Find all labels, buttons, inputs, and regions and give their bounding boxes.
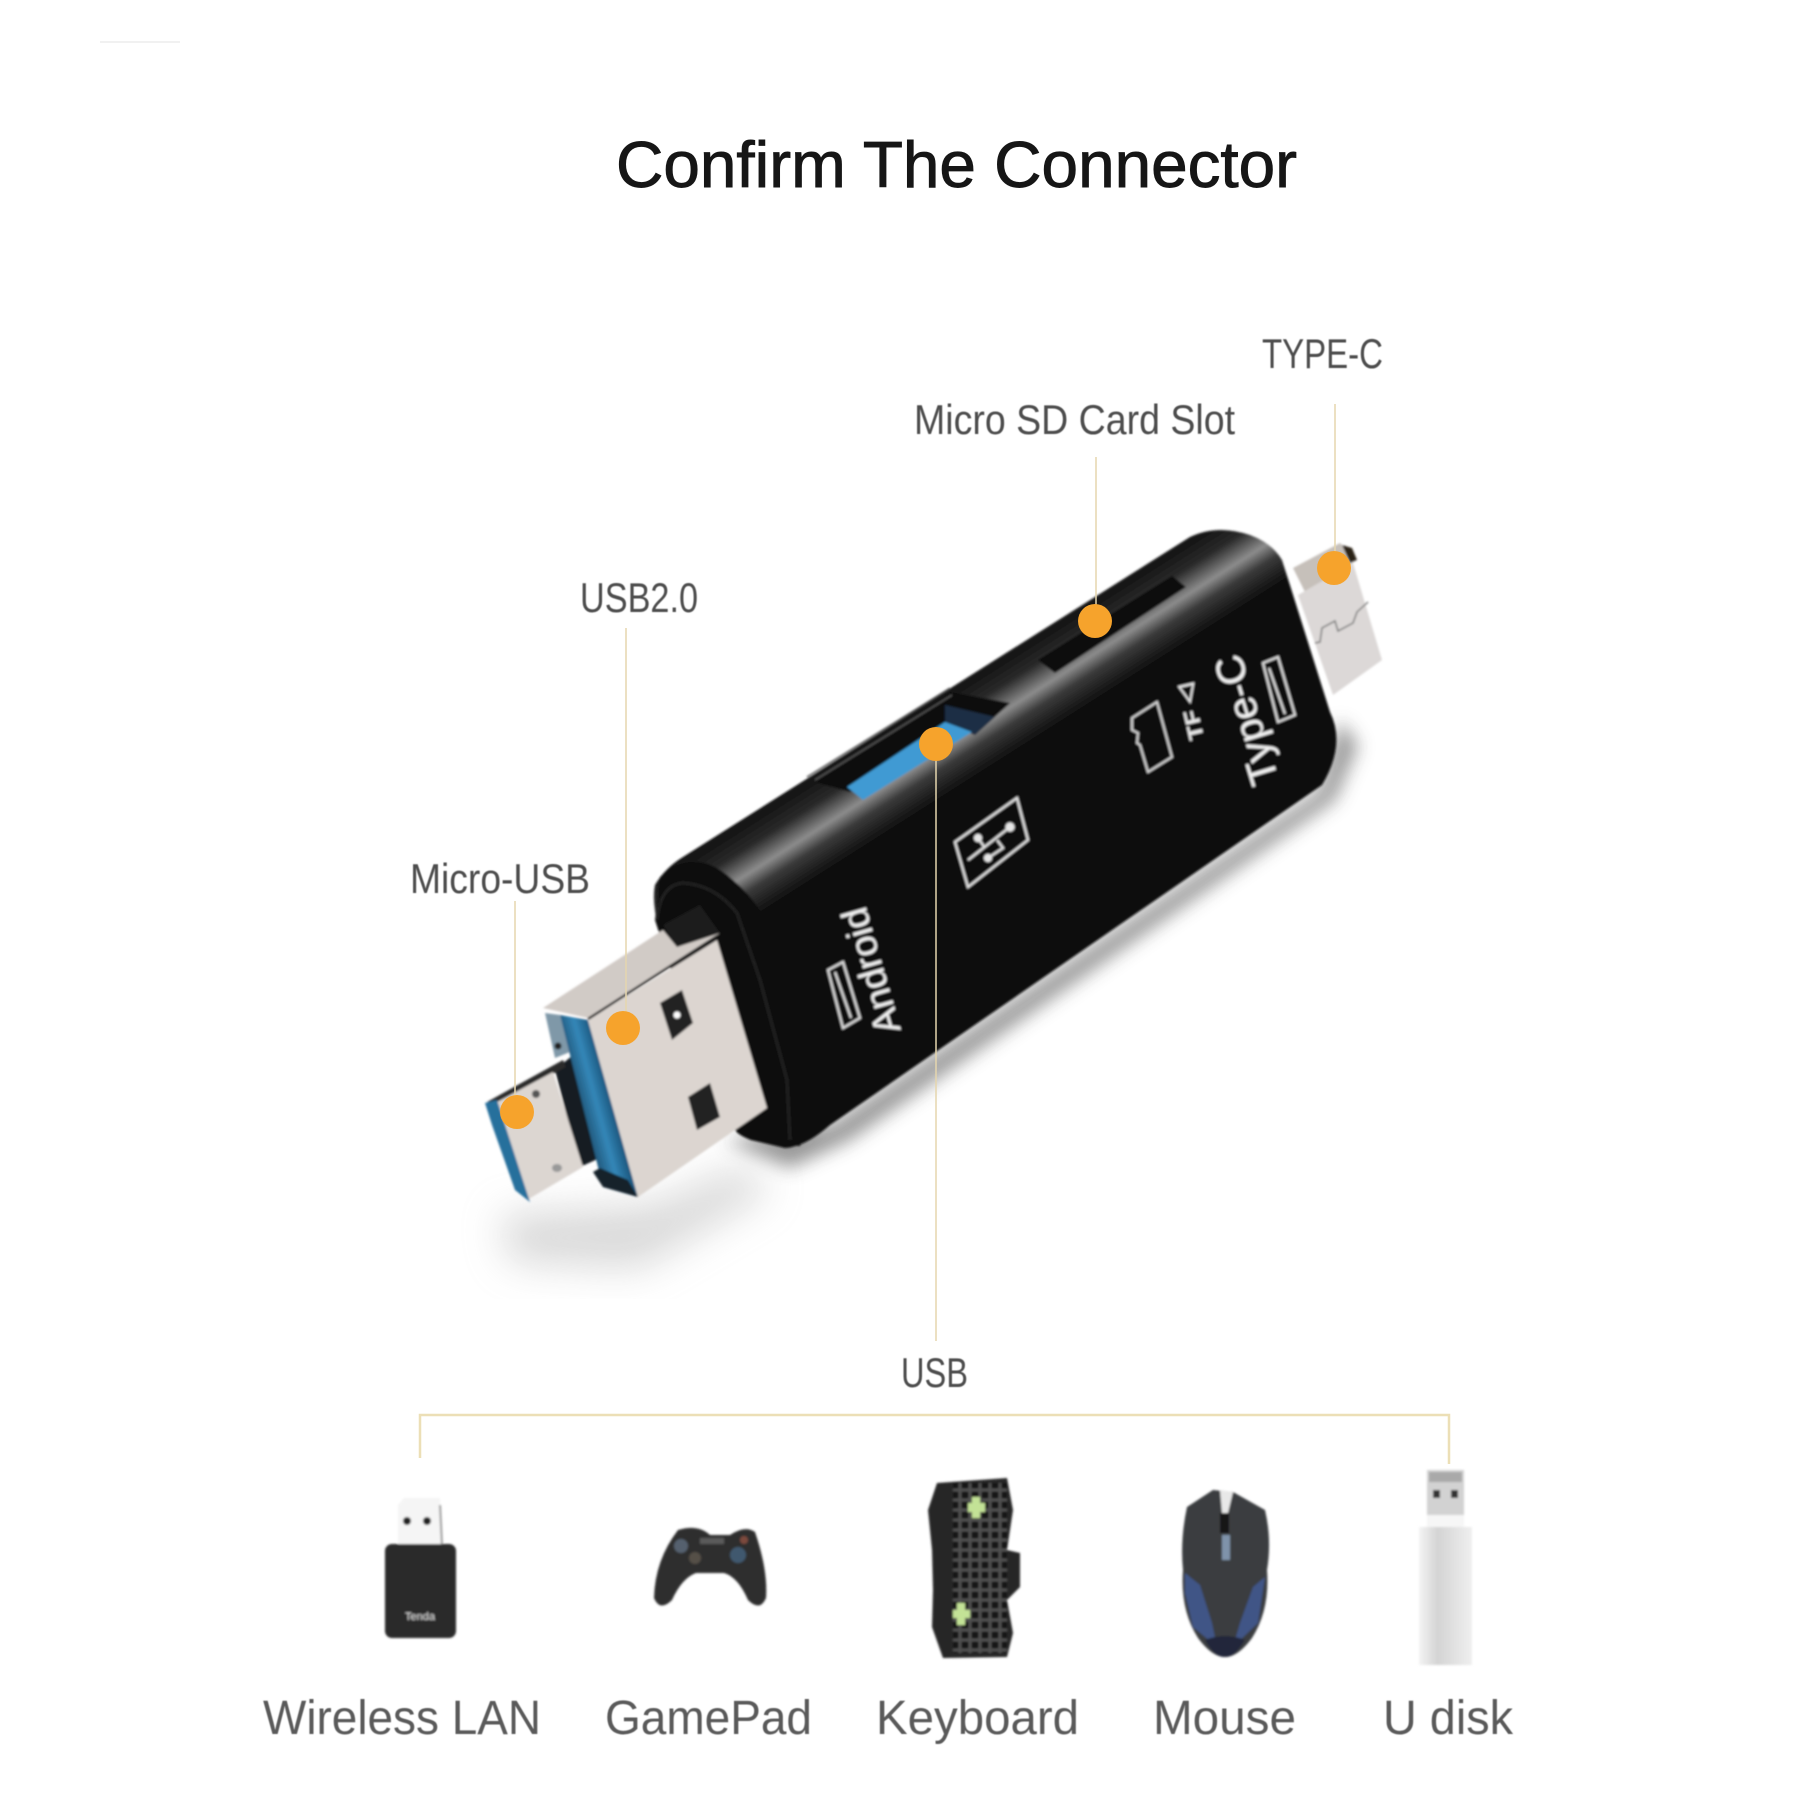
micro-USB plug	[485, 1055, 602, 1202]
icon: mouse	[1182, 1490, 1269, 1657]
label: Micro-USB: Micro-USB	[410, 855, 590, 902]
leader line: USB	[935, 744, 937, 1341]
micro SD slot	[1038, 576, 1186, 673]
leader line: USB2.0	[625, 628, 627, 1022]
adapter body	[654, 530, 1336, 1148]
icon: U disk	[1419, 1470, 1472, 1665]
marker dot: USB	[919, 727, 953, 761]
adapter product illustration	[485, 530, 1382, 1268]
end collar	[655, 862, 817, 1146]
icon: wireless LAN adapter: Tenda	[405, 1611, 436, 1623]
marker dot: TYPE-C	[1317, 551, 1351, 585]
label: Keyboard: Keyboard	[876, 1692, 1079, 1745]
Type-C marking: Type-C	[1206, 649, 1288, 790]
Type-C plug	[1293, 543, 1382, 695]
label: U disk: U disk	[1383, 1692, 1514, 1745]
Android marking: Android	[833, 903, 909, 1039]
leader line: Micro SD	[1095, 457, 1097, 620]
USB symbol mark	[955, 798, 1028, 887]
icon: wireless LAN adapter	[385, 1498, 456, 1638]
bracket connecting USB devices	[420, 1415, 1449, 1464]
label: Micro SD Card Slot: Micro SD Card Slot	[914, 396, 1235, 443]
leader line: Micro-USB	[514, 901, 516, 1108]
contact shadow	[725, 720, 1358, 1168]
label: GamePad: GamePad	[605, 1692, 812, 1745]
label: USB2.0: USB2.0	[580, 574, 698, 621]
TF marking: TF ◁	[1174, 681, 1209, 742]
icon: keyboard	[928, 1478, 1020, 1658]
soft floor shadow	[500, 1165, 770, 1268]
label: TYPE-C: TYPE-C	[1262, 330, 1383, 377]
title: Confirm The Connector	[616, 128, 1297, 201]
marker dot: Micro SD	[1078, 604, 1112, 638]
marker dot: USB2.0	[606, 1011, 640, 1045]
micro SD mark	[1132, 702, 1172, 772]
icon: gamepad	[654, 1528, 766, 1606]
leader line: TYPE-C	[1334, 404, 1336, 562]
label: Wireless LAN: Wireless LAN	[263, 1692, 541, 1745]
label: Mouse: Mouse	[1153, 1692, 1296, 1745]
label: USB: USB	[901, 1349, 968, 1396]
marker dot: Micro-USB	[500, 1095, 534, 1129]
USB female slot	[807, 688, 1010, 800]
USB 2.0 plug	[543, 930, 767, 1197]
